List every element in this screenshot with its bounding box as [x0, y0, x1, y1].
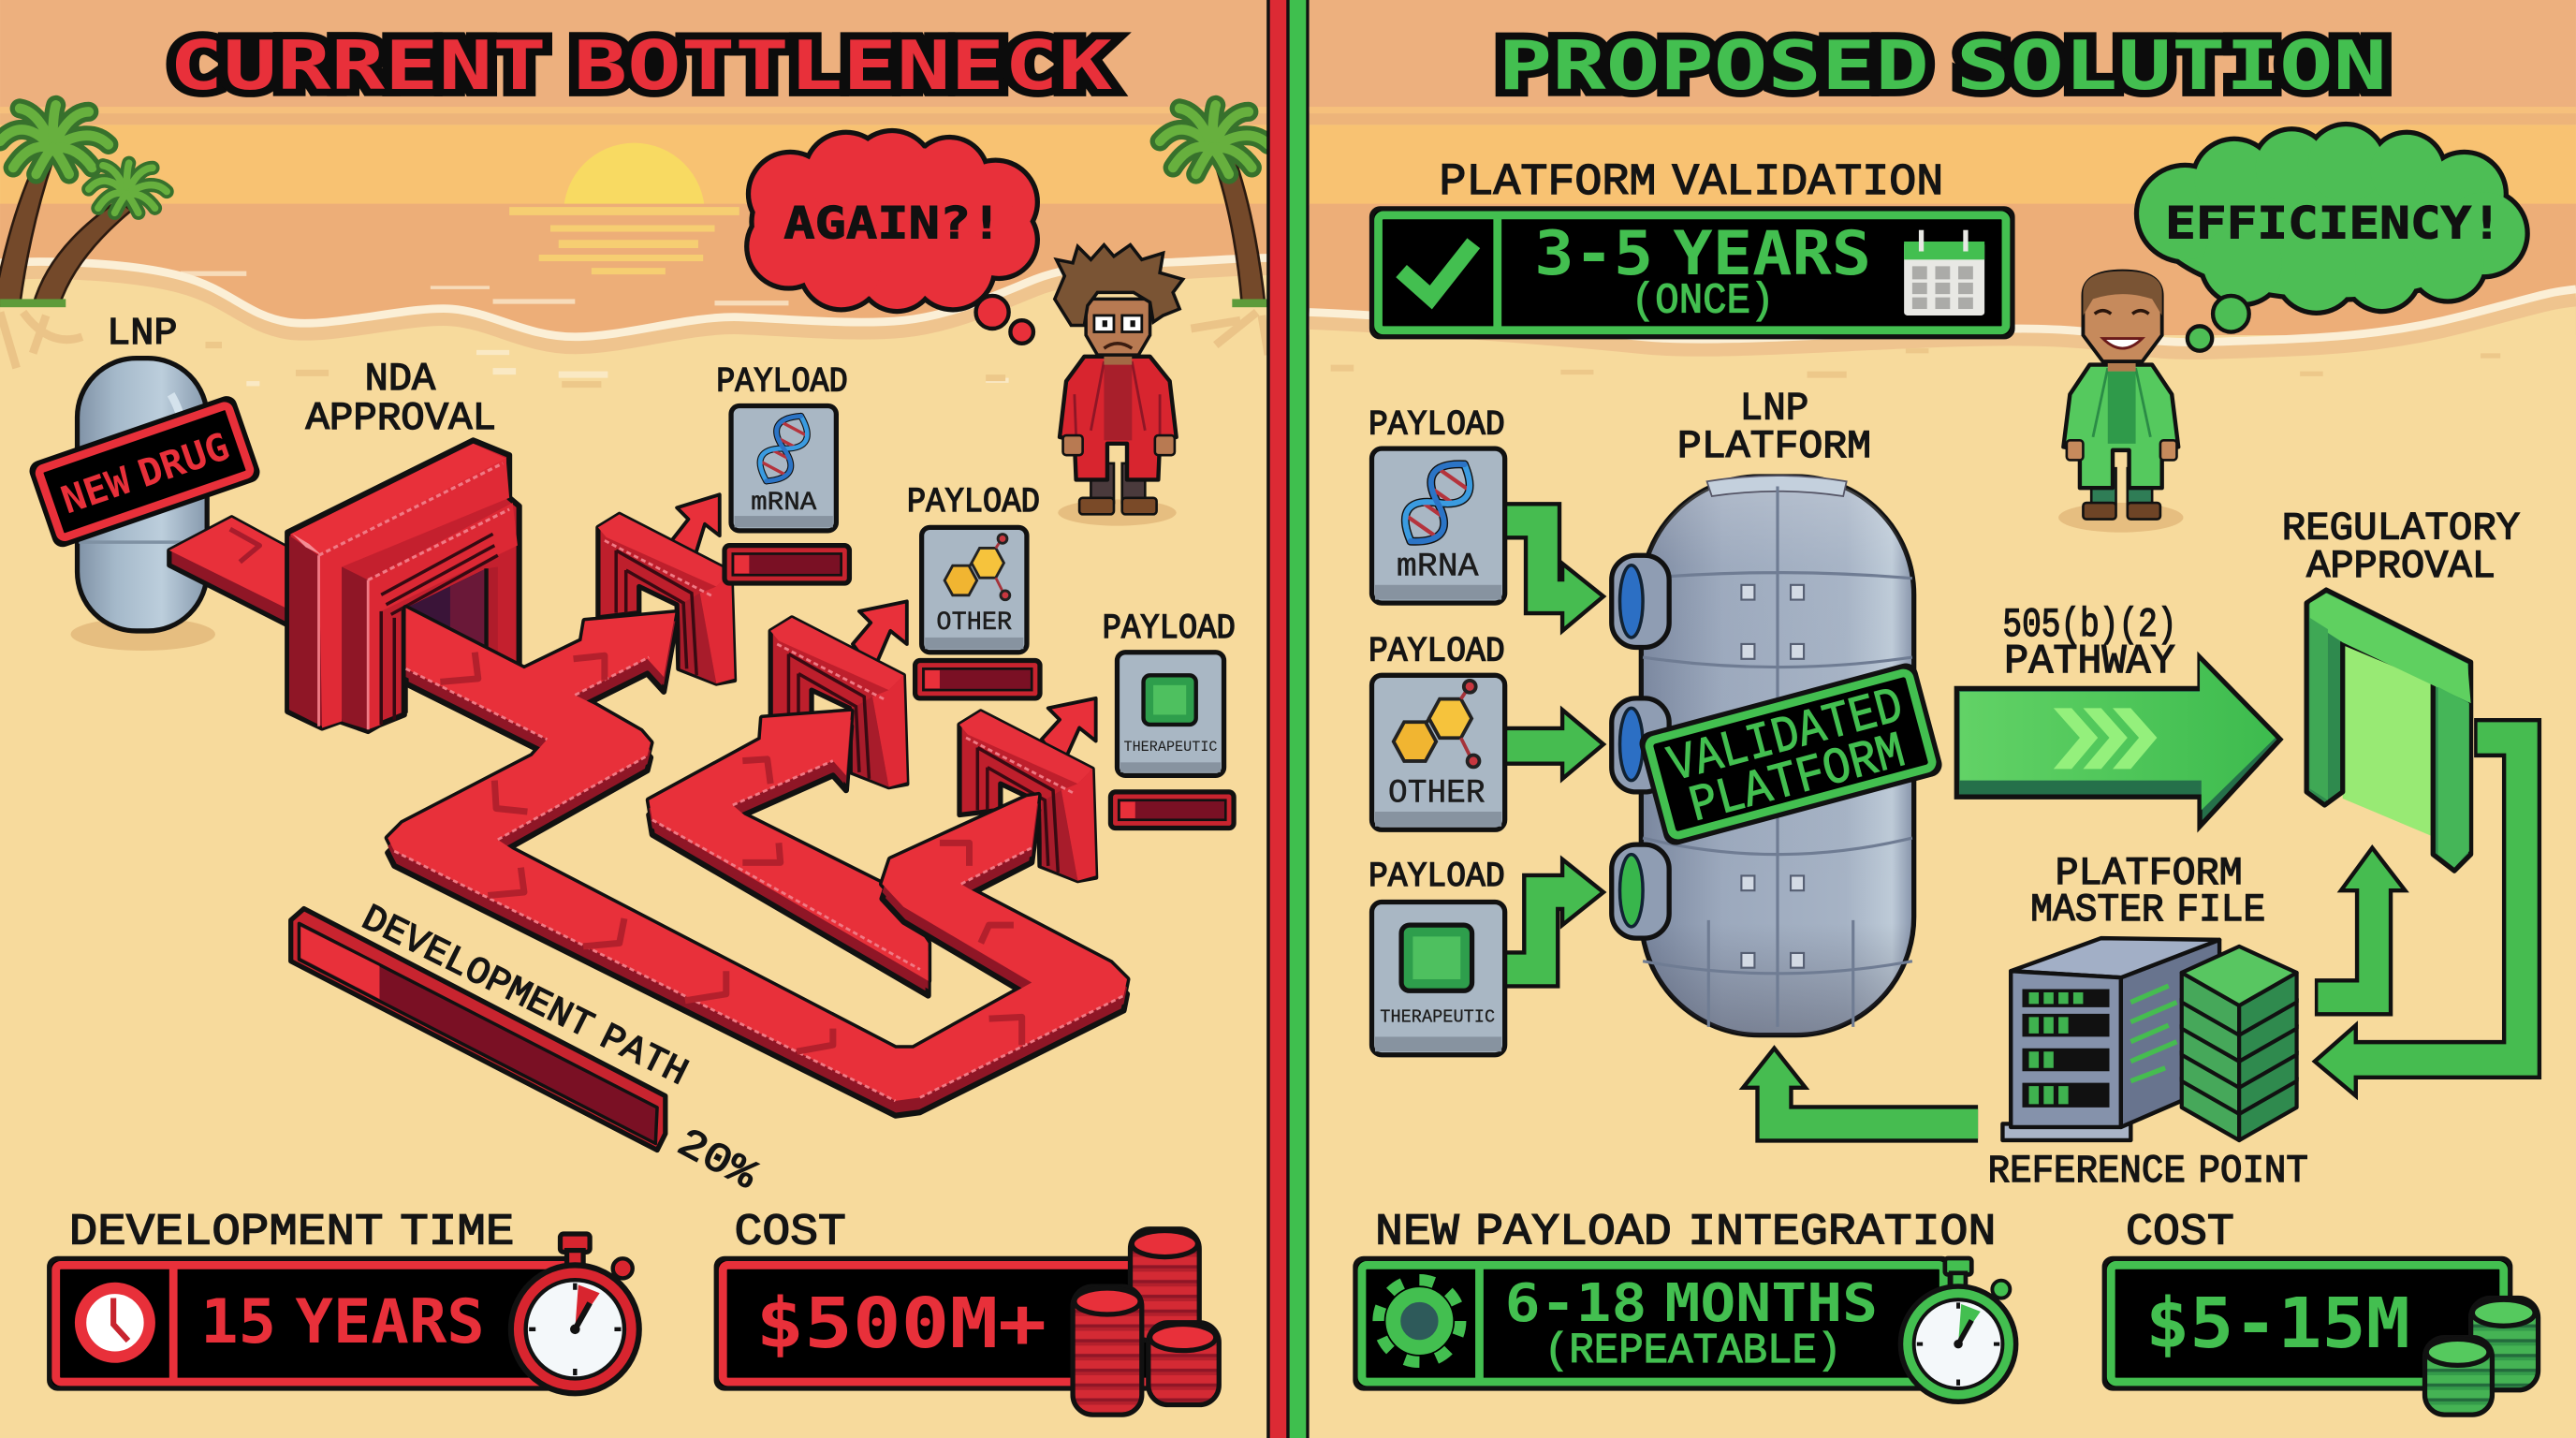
entry arrow into NDA gate — [169, 518, 289, 626]
label: LNP platform: PLATFORM — [1677, 424, 1871, 469]
progress bar: development path 20% — [291, 909, 666, 1151]
thought bubble: efficiency: EFFICIENCY! — [2165, 198, 2502, 249]
stat: platform validation time: (ONCE) — [1632, 276, 1774, 325]
label: regulatory approval — [2282, 506, 2520, 589]
stat: development time: DEVELOPMENT TIME — [69, 1209, 514, 1258]
stat: cost: COST — [2126, 1209, 2234, 1258]
background: beach — [1310, 0, 2576, 1438]
arrow: other to platform — [1505, 710, 1603, 779]
label: LNP: LNP — [107, 313, 178, 356]
stat: cost: $5-15M — [2145, 1284, 2410, 1364]
small exit arrows — [670, 494, 1096, 761]
door: regulatory approval — [2306, 590, 2471, 871]
payload card: mRNA — [1368, 405, 1505, 603]
payload card: other: PAYLOAD — [1368, 633, 1505, 672]
label: LNP platform — [1677, 387, 1871, 469]
stat: cost: COST — [735, 1209, 846, 1258]
arrow: 505(b)(2) pathway — [1956, 657, 2280, 827]
label: platform master file: PLATFORM — [2056, 851, 2243, 896]
label: 505(b)(2) pathway: 505(b)(2) — [2002, 602, 2176, 649]
track B: second attempt — [649, 712, 929, 996]
stamp: validated platform — [1640, 664, 1941, 844]
payload card: mRNA: PAYLOAD — [1368, 405, 1505, 445]
label: NDA approval: NDA — [365, 357, 436, 402]
arrow: mRNA to platform — [1505, 521, 1603, 631]
port: green — [1612, 844, 1669, 938]
icon: clock — [80, 1288, 150, 1357]
gates: payload checkpoints — [598, 514, 1096, 881]
icon: stopwatch — [511, 1234, 639, 1393]
track A: main route — [388, 608, 1127, 1116]
payload input arrows — [1505, 521, 1603, 969]
payload card: other — [1368, 633, 1505, 829]
payload card: mRNA: mRNA — [1397, 548, 1480, 585]
payload card: other — [907, 483, 1040, 653]
payload card: mRNA: mRNA — [751, 489, 816, 518]
icon: palm trees left — [0, 105, 167, 368]
panel: proposed solution — [1310, 0, 2576, 1438]
tag: new drug: NEW DRUG — [56, 424, 235, 522]
server: master file — [2002, 938, 2219, 1140]
label: LNP platform: LNP — [1740, 387, 1808, 432]
character: happy scientist — [2058, 271, 2183, 533]
background: sunset beach — [0, 0, 1268, 1438]
payload card: therapeutic: THERAPEUTIC — [1380, 1007, 1495, 1028]
thought bubble: again — [749, 133, 1035, 344]
payload card: mRNA: PAYLOAD — [716, 363, 848, 403]
stat: cost: $500M+ — [755, 1284, 1046, 1364]
payload card: mRNA — [716, 363, 848, 531]
payload card: other: OTHER — [1388, 774, 1486, 812]
stat: development time: 15 YEARS — [200, 1287, 485, 1357]
label: platform master file: MASTER FILE — [2030, 888, 2265, 932]
stat: new payload integration: 6-18 MONTHS — [1505, 1273, 1878, 1334]
title: PROPOSED SOLUTION — [1499, 26, 2387, 105]
stat: new payload integration: NEW PAYLOAD INTEGRATION — [1375, 1209, 1996, 1258]
payload card: therapeutic — [1103, 609, 1236, 775]
stat: platform validation time: 3-5 YEARS — [1534, 219, 1871, 289]
icon: check mark — [1401, 243, 1473, 298]
payload card: other: PAYLOAD — [907, 483, 1040, 522]
label: platform master file — [2030, 851, 2265, 932]
stack: green data blocks — [2182, 946, 2297, 1140]
thought bubble: again: AGAIN?! — [783, 198, 1003, 249]
icon: calendar — [1904, 230, 1984, 315]
stat: cost — [2104, 1209, 2539, 1415]
port: blue — [1612, 555, 1669, 647]
payload card: therapeutic: THERAPEUTIC — [1123, 739, 1218, 756]
payload card: therapeutic: PAYLOAD — [1368, 858, 1505, 897]
character: frustrated scientist — [1055, 244, 1183, 526]
stat: new payload integration: (REPEATABLE) — [1544, 1327, 1841, 1375]
label: regulatory approval: REGULATORY — [2282, 506, 2520, 551]
label: 505(b)(2) pathway — [2002, 602, 2176, 685]
stamp: validated platform: VALIDATED — [1663, 679, 1910, 796]
label: 20 percent: 20% — [669, 1121, 764, 1200]
capsule: LNP — [71, 359, 215, 651]
payload card: therapeutic — [1368, 858, 1505, 1055]
gate: NDA approval — [287, 440, 520, 731]
progress bar: other — [915, 661, 1040, 698]
stat: platform validation time — [1372, 209, 2012, 337]
icon: stopwatch — [1900, 1258, 2016, 1401]
progress bar: mRNA — [724, 546, 849, 583]
payload card: other: OTHER — [936, 609, 1012, 638]
label: development path: DEVELOPMENT PATH — [355, 898, 695, 1095]
thought bubble: efficiency — [2139, 126, 2525, 351]
panel: current bottleneck — [0, 0, 1268, 1438]
label: regulatory approval: APPROVAL — [2306, 544, 2496, 589]
label: NDA approval — [305, 357, 496, 441]
icon: gear — [1379, 1280, 1460, 1362]
payload card: therapeutic: PAYLOAD — [1103, 609, 1236, 649]
stat: development time — [50, 1209, 639, 1393]
arrow: therapeutic to platform — [1505, 859, 1603, 969]
arrow: approval feedback loop — [2315, 738, 2522, 1096]
label: reference point: REFERENCE POINT — [1988, 1149, 2308, 1194]
stat: new payload integration — [1355, 1209, 2016, 1401]
icon: green coin stacks — [2424, 1298, 2539, 1415]
label: 505(b)(2) pathway: PATHWAY — [2004, 638, 2175, 685]
label: platform validation: PLATFORM VALIDATION — [1439, 158, 1943, 208]
arrow: master file to tank — [1743, 1049, 1978, 1123]
tank: LNP platform — [1612, 476, 1914, 1035]
center divider — [1266, 0, 1310, 1438]
progress bar: therapeutic — [1110, 792, 1234, 829]
label: NDA approval: APPROVAL — [305, 396, 496, 441]
tag: new drug — [30, 396, 259, 547]
stamp: validated platform: PLATFORM — [1684, 724, 1911, 836]
red development path — [388, 608, 1127, 1116]
icon: red coin stacks — [1073, 1229, 1219, 1415]
title: CURRENT BOTTLENECK — [169, 26, 1113, 105]
icon: palm tree right — [1160, 105, 1268, 355]
port: orange/blue — [1612, 698, 1669, 792]
stat: cost — [716, 1209, 1219, 1415]
arrow: master file to approval — [2315, 848, 2405, 997]
